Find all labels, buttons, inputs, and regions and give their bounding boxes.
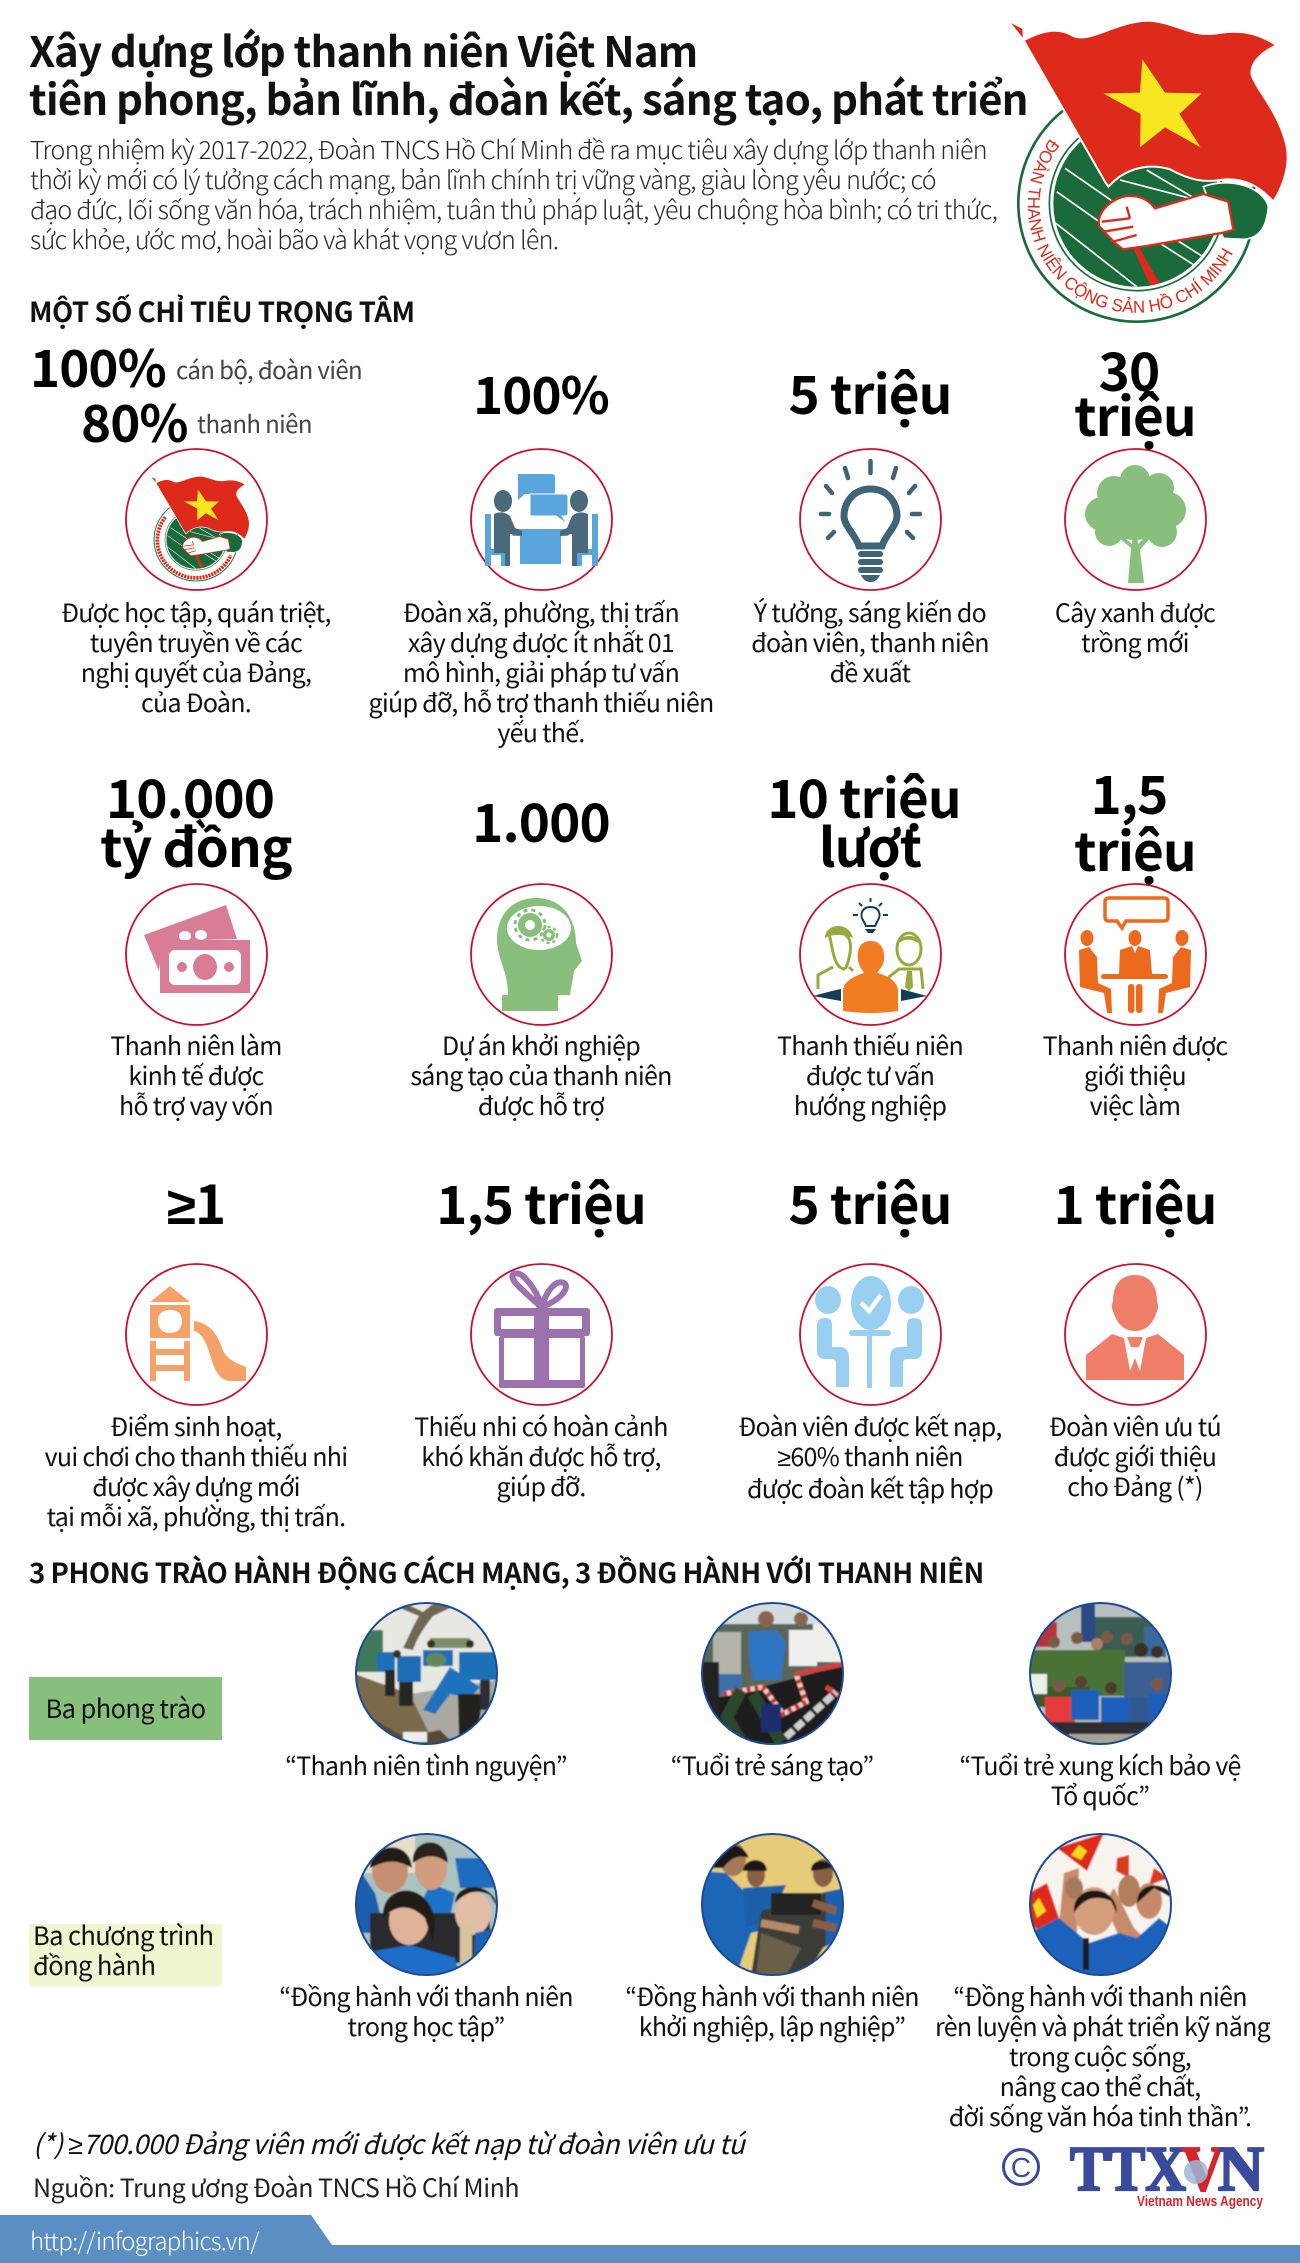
label: được hỗ trợ	[478, 1087, 604, 1123]
label: đoàn viên, thanh niên	[751, 624, 989, 660]
number: 30	[1099, 331, 1159, 407]
icon: head with gears	[470, 883, 613, 1026]
caption: Tổ quốc”	[1051, 1777, 1149, 1813]
intro text: sức khỏe, ước mơ, hoài bão và khát vọng vươn lên.	[30, 221, 558, 257]
copyright symbol	[1000, 2145, 1042, 2189]
number: lượt	[819, 807, 921, 883]
photo: students at computers	[355, 1833, 498, 1976]
icon: playground slide	[125, 1263, 268, 1406]
caption: “Tuổi trẻ sáng tạo”	[671, 1747, 873, 1783]
label	[110, 1027, 282, 1123]
label box: three movements: Ba phong trào	[45, 1689, 206, 1726]
title: Xây dựng lớp thanh niên Việt Nam	[29, 19, 697, 80]
label: hướng nghiệp	[794, 1087, 946, 1123]
label box: three companion programmes: Ba chương trình	[33, 1916, 213, 1953]
label: hỗ trợ vay vốn	[119, 1087, 273, 1123]
label: Dự án khởi nghiệp	[442, 1027, 640, 1063]
label	[414, 1408, 668, 1504]
number: 10.000	[106, 758, 274, 834]
label	[751, 594, 989, 690]
title	[29, 19, 1028, 128]
caption: trong học tập”	[347, 2008, 505, 2044]
emblem: Ho Chi Minh Communist Youth Union logo	[1011, 22, 1287, 323]
label: được xây dựng mới	[92, 1468, 300, 1504]
caption: “Thanh niên tình nguyện”	[285, 1747, 567, 1783]
label: Cây xanh được	[1055, 594, 1215, 630]
metric: 100% cadres, 80% youth	[30, 328, 362, 720]
label: tuyên truyền về các	[90, 624, 302, 660]
label: Thanh niên làm	[110, 1027, 282, 1063]
heading: three movements: 3 PHONG TRÀO HÀNH ĐỘNG CÁCH MẠNG, 3 ĐỒNG HÀNH VỚI THANH NIÊN	[29, 1551, 984, 1591]
icon: lightbulb	[799, 448, 942, 591]
photo: youth waving flags	[1029, 1833, 1172, 1976]
caption: rèn luyện và phát triển kỹ năng	[935, 2008, 1270, 2044]
number: triệu	[1074, 811, 1196, 887]
intro text: thời kỳ mới có lý tưởng cách mạng, bản lĩnh chính trị vững vàng, giàu lòng yêu nước; có	[30, 161, 936, 197]
number: 100%: 100%	[30, 328, 166, 402]
label	[1043, 1027, 1228, 1123]
photo: students repairing engine	[701, 1833, 844, 1976]
website link: http://infographics.vn/	[30, 2222, 259, 2257]
metric: 10,000 billion dong	[100, 758, 292, 1123]
label	[369, 594, 713, 750]
copyright symbol: C	[1011, 2152, 1031, 2183]
label	[45, 1408, 347, 1534]
label: Ý tưởng, sáng kiến do	[754, 594, 986, 630]
caption	[271, 1981, 581, 2041]
photo: group with police cadets	[1029, 1602, 1172, 1745]
photo card: creative youth	[671, 1602, 873, 1783]
label: ≥60% thanh niên	[777, 1438, 963, 1474]
label: nghị quyết của Đảng,	[81, 654, 311, 690]
heading: key targets: MỘT SỐ CHỈ TIÊU TRỌNG TÂM	[29, 290, 415, 330]
photo card: companion in study	[279, 1833, 573, 2044]
number: tỷ đồng	[100, 807, 292, 883]
icon: people talking at table	[470, 448, 613, 591]
caption: trong cuộc sống,	[1009, 2038, 1191, 2074]
number: triệu	[1074, 376, 1196, 452]
number: ≥1	[167, 1164, 225, 1240]
number: 1.000	[472, 782, 610, 858]
emblem: Ho Chi Minh Communist Youth Union logo: ĐOÀN THANH NIÊN CỘNG SẢN HỒ CHÍ MINH	[1028, 139, 1233, 313]
label: Thanh thiếu niên	[777, 1027, 963, 1063]
metric: 1,000 startup projects	[410, 782, 672, 1123]
metric: 10 million career guidance	[767, 758, 963, 1123]
caption: đời sống văn hóa tinh thần”.	[949, 2098, 1251, 2134]
note: youth: thanh niên	[197, 405, 312, 440]
label	[410, 1027, 672, 1123]
metric: at least 1 play space	[45, 1164, 347, 1534]
label: Đoàn xã, phường, thị trấn	[403, 594, 679, 630]
label: kinh tế được	[128, 1057, 264, 1093]
metric: 5 million new members	[738, 1164, 1002, 1506]
caption: “Đồng hành với thanh niên	[953, 1978, 1247, 2014]
photo card: companion in entrepreneurship	[625, 1833, 919, 2044]
label: giúp đỡ.	[496, 1468, 586, 1504]
caption: nâng cao thể chất,	[1000, 2068, 1200, 2104]
source: Nguồn: Trung ương Đoàn TNCS Hồ Chí Minh	[33, 2169, 519, 2205]
number: 1,5	[1090, 754, 1168, 830]
caption	[945, 1750, 1255, 1810]
label: xây dựng được ít nhất 01	[408, 624, 674, 660]
number: 1,5 triệu	[436, 1164, 646, 1240]
photo: students at robot track	[701, 1602, 844, 1745]
label: Thanh niên được	[1043, 1027, 1227, 1063]
label: giúp đỡ, hỗ trợ thanh thiếu niên	[369, 684, 713, 720]
number: 1 triệu	[1053, 1164, 1217, 1240]
label: Điểm sinh hoạt,	[110, 1408, 282, 1444]
label: của Đoàn.	[141, 684, 251, 720]
number	[767, 758, 961, 883]
metric: 1.5 million disadvantaged children	[414, 1164, 668, 1504]
caption	[617, 1981, 927, 2041]
footnote: (*) ≥700.000 Đảng viên mới được kết nạp từ đoàn viên ưu tú	[33, 2123, 744, 2162]
label: giới thiệu	[1084, 1057, 1186, 1093]
icon: tree	[1064, 448, 1207, 591]
number: 80%: 80%	[81, 383, 188, 457]
caption: “Tuổi trẻ xung kích bảo vệ	[959, 1747, 1241, 1783]
metric: 1.5 million job referrals	[1043, 754, 1228, 1123]
icon: people with check	[799, 1263, 942, 1406]
footer bar	[0, 2215, 1300, 2263]
number	[1074, 754, 1196, 887]
label: được đoàn kết tập hợp	[747, 1470, 993, 1506]
label: yếu thế.	[497, 714, 585, 750]
icon: youth union emblem	[125, 448, 268, 591]
label	[738, 1408, 1002, 1506]
note: cadres: cán bộ, đoàn viên	[176, 351, 362, 386]
icon: gift	[470, 1263, 613, 1406]
intro text: đạo đức, lối sống văn hóa, trách nhiệm, tuân thủ pháp luật, yêu chuộng hòa bình; có tri thức,	[30, 191, 997, 227]
icon: money	[125, 883, 268, 1026]
photo: volunteers shovelling	[355, 1602, 498, 1745]
photo card: youth defending the fatherland	[959, 1602, 1241, 1813]
icon: person in suit	[1064, 1263, 1206, 1406]
label: được tư vấn	[806, 1057, 934, 1093]
label: Đoàn viên được kết nạp,	[738, 1408, 1002, 1444]
label: việc làm	[1090, 1087, 1180, 1123]
icon: group with idea	[799, 883, 942, 1026]
caption	[935, 1981, 1265, 2131]
number: 100%	[473, 355, 609, 429]
metric: 5 million ideas	[751, 354, 989, 690]
caption: khởi nghiệp, lập nghiệp”	[639, 2008, 905, 2044]
label: tại mỗi xã, phường, thị trấn.	[47, 1498, 345, 1534]
label: cho Đảng (*)	[1067, 1468, 1203, 1504]
caption: “Đồng hành với thanh niên	[625, 1978, 919, 2014]
label: trồng mới	[1081, 624, 1189, 660]
label	[1055, 594, 1215, 660]
metric: 30 million trees	[1055, 331, 1215, 660]
icon: meeting people	[1064, 883, 1207, 1026]
label: mô hình, giải pháp tư vấn	[403, 654, 679, 690]
intro text: Trong nhiệm kỳ 2017-2022, Đoàn TNCS Hồ Chí Minh đề ra mục tiêu xây dựng lớp thanh niên	[30, 131, 987, 167]
number: 10 triệu	[767, 758, 961, 834]
label: sáng tạo của thanh niên	[410, 1057, 672, 1093]
photo card: volunteer youth	[285, 1602, 567, 1783]
number: 5 triệu	[788, 1164, 952, 1240]
number	[1074, 331, 1196, 452]
caption: “Đồng hành với thanh niên	[279, 1978, 573, 2014]
label box: three companion programmes	[29, 1924, 222, 1986]
label	[777, 1027, 963, 1123]
label: Đoàn viên ưu tú	[1049, 1408, 1221, 1444]
TTXVN agency logo	[1068, 2142, 1268, 2212]
photo card: companion in skills and culture	[935, 1833, 1270, 2134]
number	[100, 758, 292, 883]
label box: three movements	[29, 1677, 222, 1740]
label: được giới thiệu	[1054, 1438, 1216, 1474]
intro text	[30, 131, 997, 257]
number: 5 triệu	[788, 354, 952, 430]
title: tiên phong, bản lĩnh, đoàn kết, sáng tạo, phát triển	[29, 67, 1028, 128]
label	[61, 594, 331, 720]
metric: 1 million outstanding members	[1015, 1165, 1255, 1540]
label	[1015, 1411, 1255, 1501]
label: đề xuất	[830, 654, 910, 690]
label: Được học tập, quán triệt,	[61, 594, 331, 630]
label: khó khăn được hỗ trợ,	[421, 1438, 661, 1474]
metric: 100% communes	[369, 355, 713, 750]
label box: three companion programmes: đồng hành	[33, 1946, 155, 1983]
label: vui chơi cho thanh thiếu nhi	[45, 1438, 347, 1474]
label: Thiếu nhi có hoàn cảnh	[414, 1408, 668, 1444]
